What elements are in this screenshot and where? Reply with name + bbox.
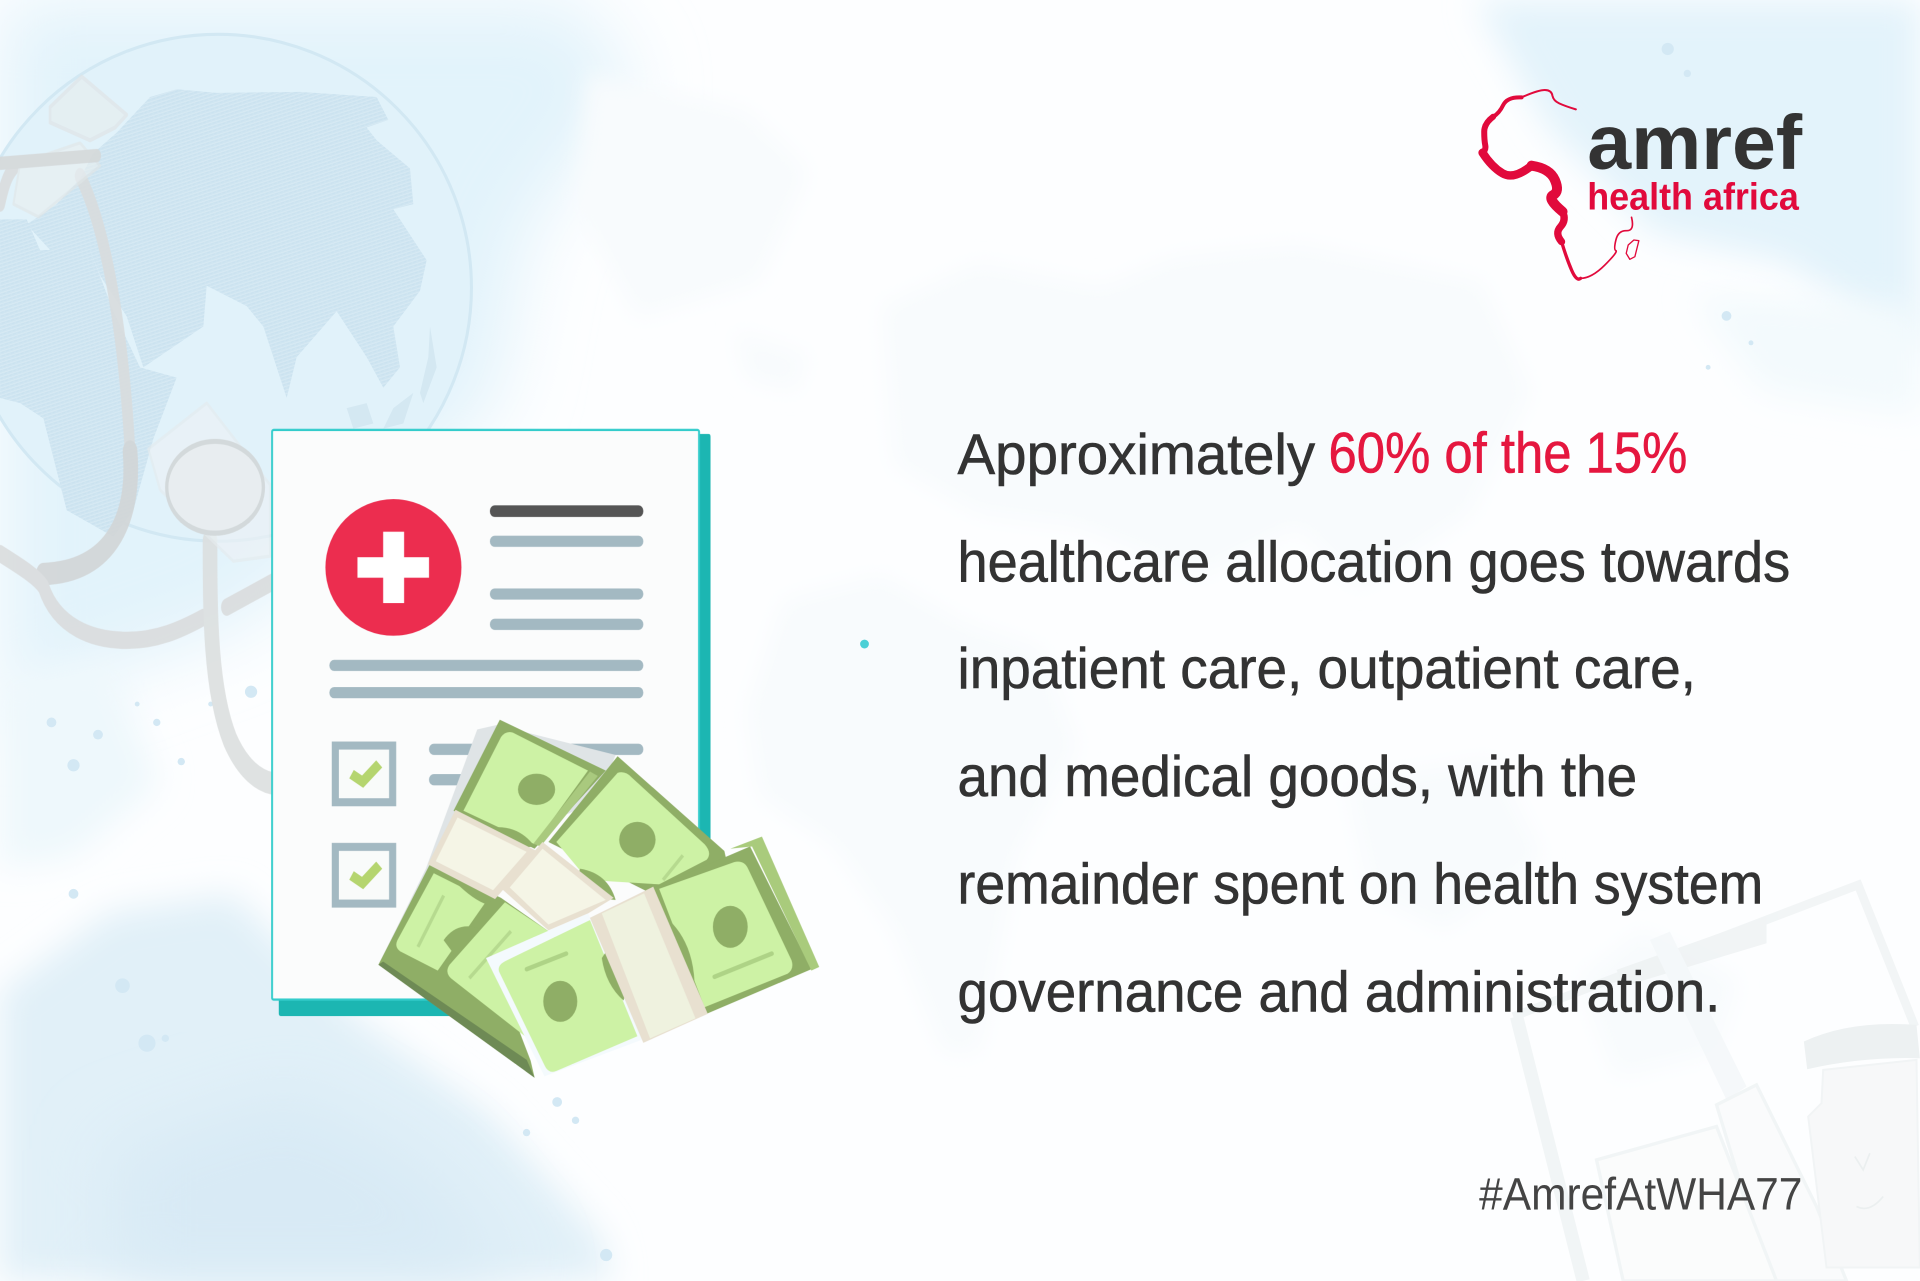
- decorative teal dot: [860, 640, 869, 648]
- document sheet: [272, 430, 699, 1000]
- document teal shadow: [279, 434, 711, 1016]
- main statement text: [958, 422, 1790, 1024]
- highlighted figures: 60% of the 15%: [1329, 422, 1687, 486]
- money shadow: [378, 725, 616, 1000]
- main statement text: remainder spent on health system: [958, 853, 1763, 917]
- icon: checkbox two: [335, 847, 393, 904]
- icon: checkbox one: [335, 746, 393, 802]
- stethoscope: [0, 77, 273, 783]
- icon: red medical cross: [325, 499, 461, 636]
- main statement text: healthcare allocation goes towards: [958, 531, 1790, 595]
- globe illustration: [0, 34, 471, 541]
- logo: amref health africa: [1483, 90, 1802, 279]
- main statement text: and medical goods, with the: [958, 745, 1637, 809]
- clipboard: [1513, 885, 1915, 1281]
- main statement text: governance and administration.: [958, 960, 1720, 1024]
- logo Africa outline: [1483, 90, 1639, 279]
- medical document with money: [272, 430, 819, 1078]
- logo tagline: health africa: [1587, 175, 1800, 217]
- background: faint vial and clipboard: [1513, 885, 1920, 1281]
- banknotes bundle: [378, 720, 819, 1078]
- logo wordmark: amref: [1587, 100, 1802, 186]
- vial: [1804, 1024, 1920, 1268]
- hashtag: #AmrefAtWHA77: [1479, 1169, 1802, 1220]
- main statement text: Approximately: [958, 423, 1315, 487]
- document text lines: [329, 505, 643, 785]
- main statement text: inpatient care, outpatient care,: [958, 637, 1696, 701]
- background: faint world map: [576, 73, 1739, 1077]
